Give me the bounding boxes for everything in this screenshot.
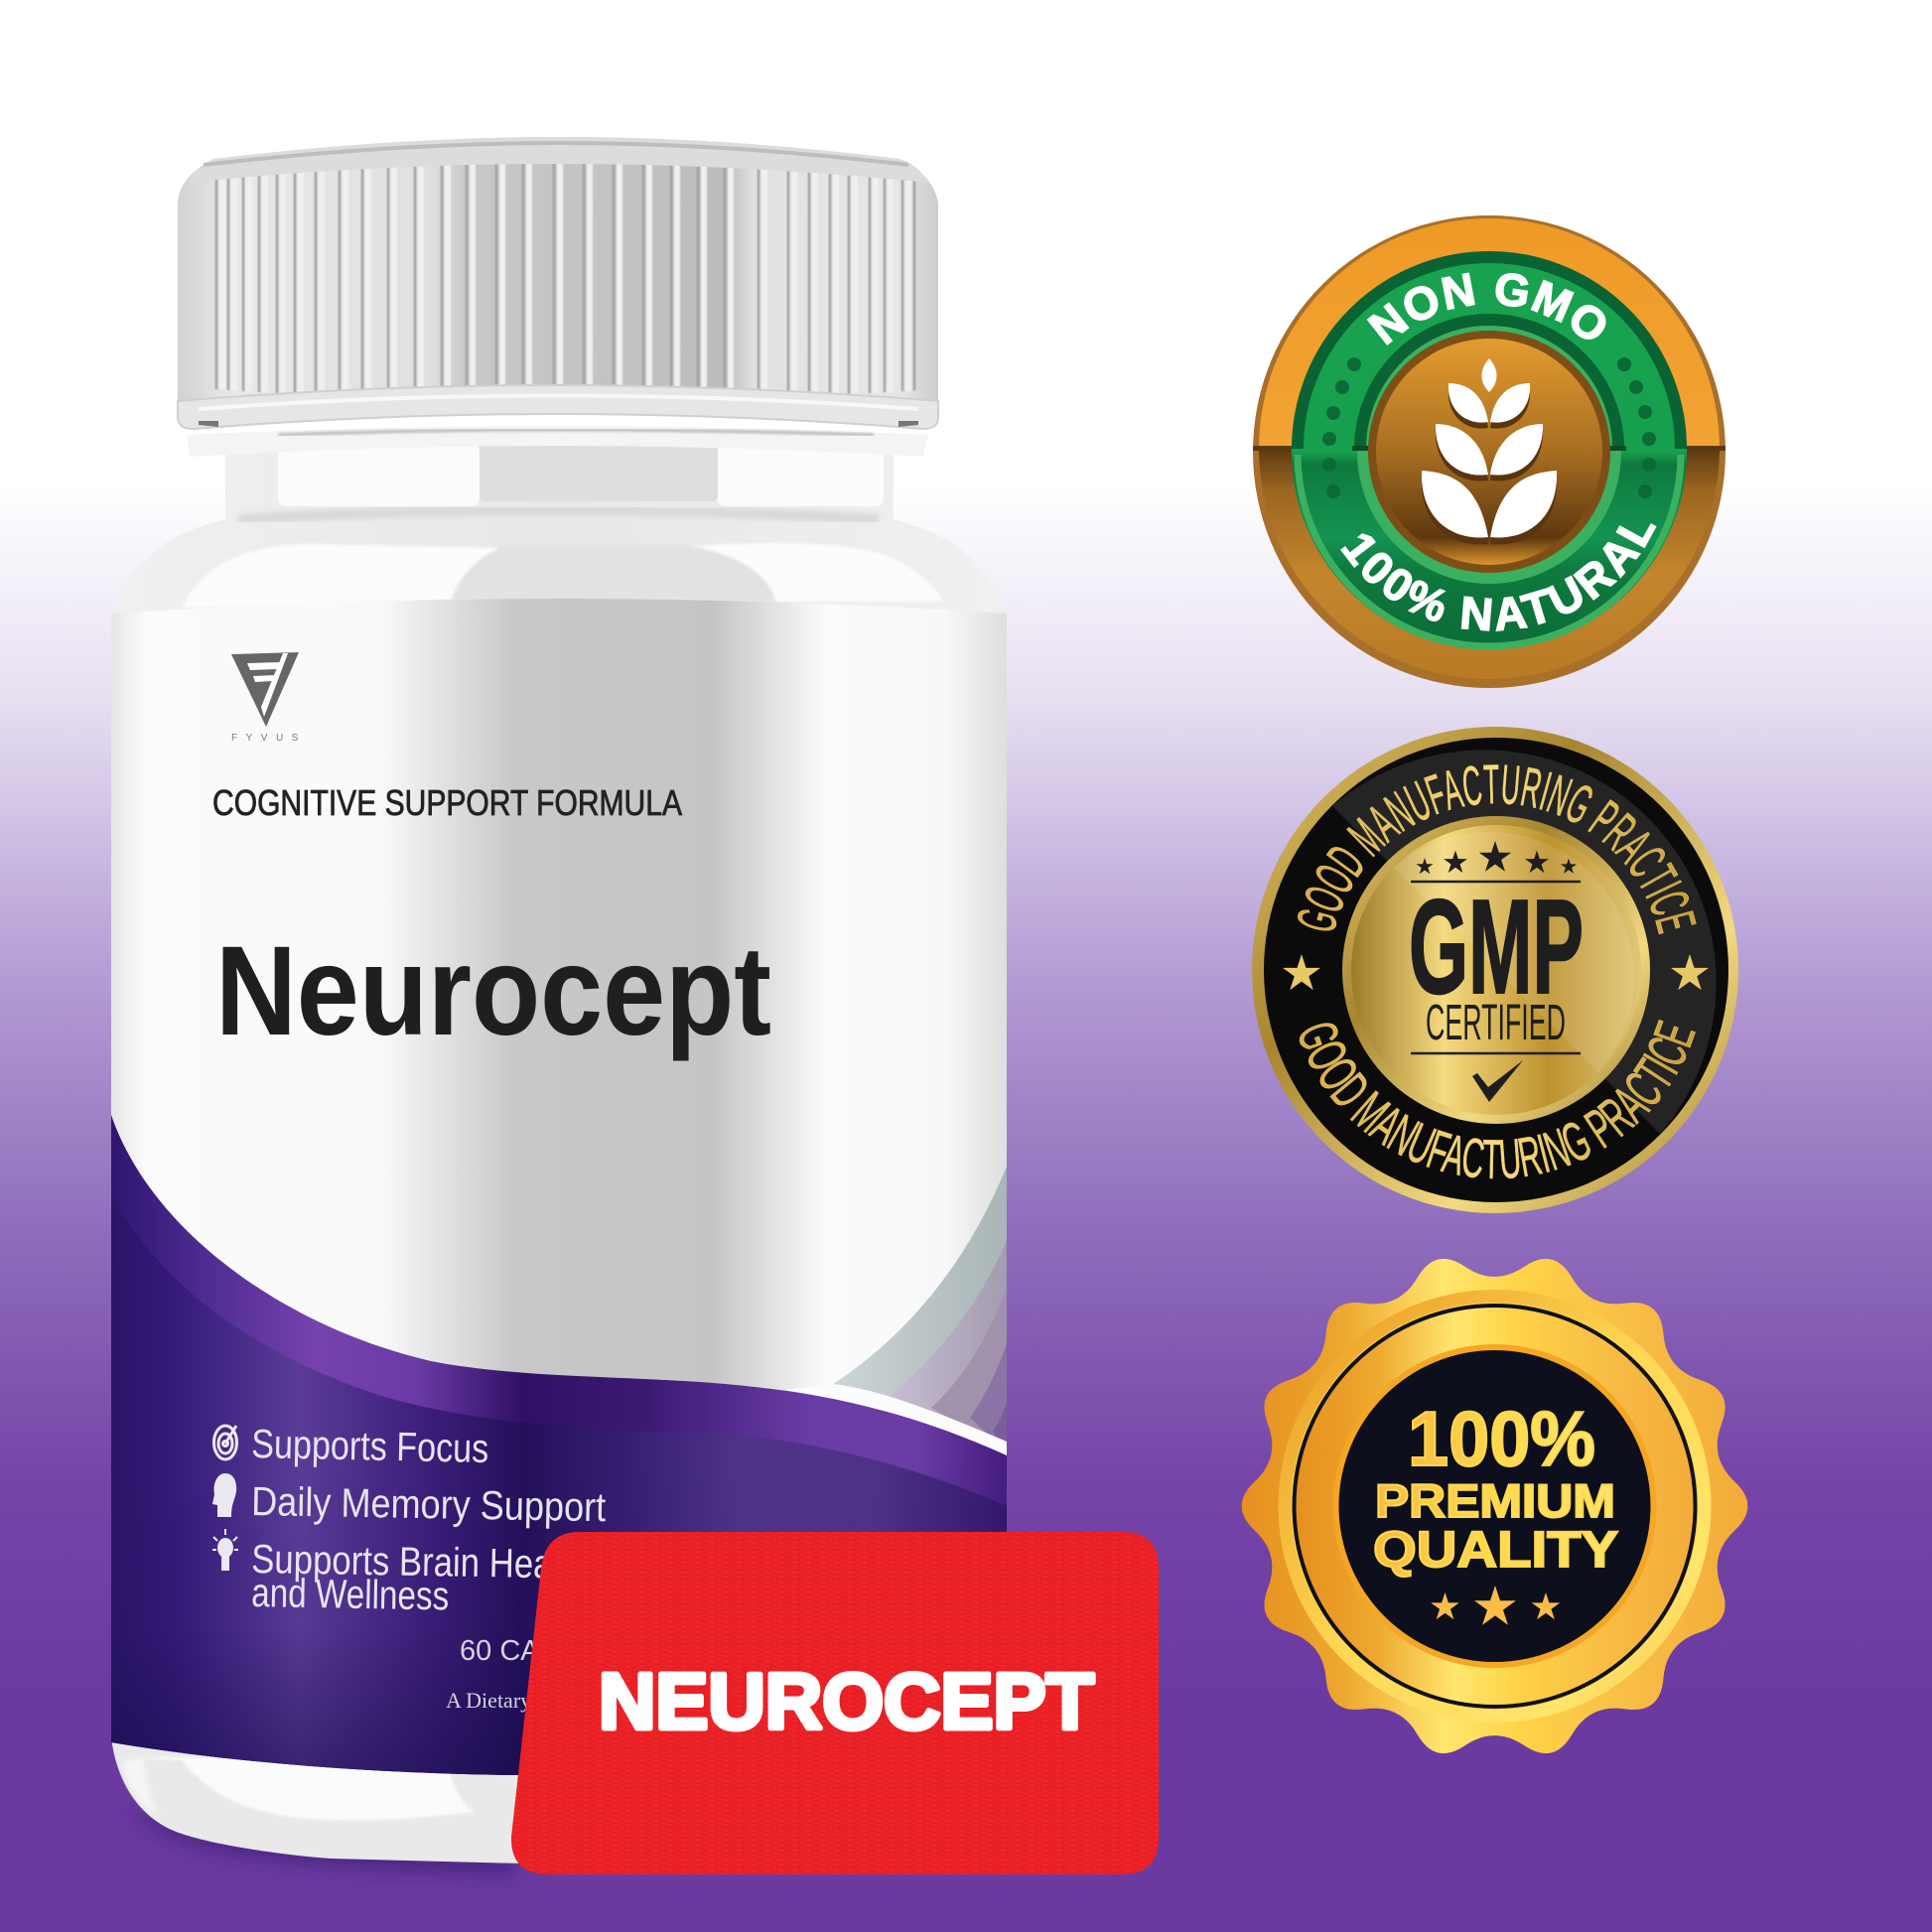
label subtitle: COGNITIVE SUPPORT FORMULA bbox=[212, 782, 682, 823]
bottle shoulder and neck bbox=[112, 426, 1007, 616]
divider lines bbox=[1411, 882, 1581, 1053]
bottle base bbox=[111, 1737, 1007, 1866]
gmp ring text bottom: GOOD MANUFACTURING PRACTICE bbox=[1299, 1019, 1696, 1179]
supplement note: A Dietary Supplement bbox=[446, 1688, 641, 1713]
seal quality: QUALITY bbox=[1373, 1521, 1618, 1578]
label white stripe bbox=[784, 1384, 1007, 1457]
icon: wheat bbox=[1422, 358, 1557, 544]
gmp heading: GMP bbox=[1409, 872, 1584, 1022]
label swoosh fan bbox=[832, 1167, 1007, 1451]
gmp gold disc bbox=[1342, 816, 1650, 1124]
gmp certified label: CERTIFIED bbox=[1426, 994, 1566, 1050]
product name: Neurocept bbox=[215, 920, 771, 1062]
scalloped seal bbox=[1242, 1259, 1747, 1753]
seal rings bbox=[1279, 1290, 1712, 1723]
badge text: non gmo: NON GMO bbox=[1366, 272, 1606, 345]
benefit: wellness: and Wellness bbox=[251, 1570, 450, 1618]
icon: head bbox=[212, 1473, 236, 1517]
icon: target bbox=[214, 1426, 236, 1459]
benefit: daily memory: Daily Memory Support bbox=[251, 1478, 607, 1530]
badge: premium quality bbox=[1242, 1259, 1747, 1753]
red name card bbox=[511, 1532, 1159, 1874]
seal premium: PREMIUM bbox=[1375, 1474, 1615, 1527]
brand logo bbox=[231, 652, 307, 744]
seal 100 percent: 100% bbox=[1408, 1395, 1595, 1482]
icon: light bulb bbox=[212, 1529, 238, 1571]
badge core bbox=[1368, 331, 1610, 573]
gmp top stars bbox=[1416, 841, 1577, 874]
ring dots bbox=[1322, 357, 1656, 498]
purple label wave bbox=[111, 1115, 1007, 1778]
capsule count: 60 CAPSULES bbox=[460, 1635, 653, 1667]
bottle ground shadow bbox=[129, 1807, 516, 1876]
brand name: FYVUS bbox=[231, 733, 307, 744]
badge: non gmo bbox=[1253, 215, 1725, 688]
seal stars bbox=[1431, 1586, 1560, 1625]
badge text: natural: 100% NATURAL bbox=[1340, 523, 1656, 631]
icon: check mark bbox=[1472, 1060, 1523, 1102]
gmp ring text top: GOOD MANUFACTURING PRACTICE bbox=[1297, 764, 1697, 935]
green ring bbox=[1292, 254, 1687, 649]
bottle cap bbox=[178, 137, 938, 429]
card title: NEUROCEPT bbox=[599, 1657, 1094, 1745]
badge: gmp certified bbox=[1252, 727, 1738, 1213]
benefit: brain health: Supports Brain Health bbox=[251, 1536, 590, 1587]
gmp side stars bbox=[1283, 954, 1709, 990]
bottle label bbox=[111, 599, 1007, 1778]
bottle bbox=[111, 137, 1007, 1876]
benefit: supports focus: Supports Focus bbox=[251, 1421, 489, 1471]
